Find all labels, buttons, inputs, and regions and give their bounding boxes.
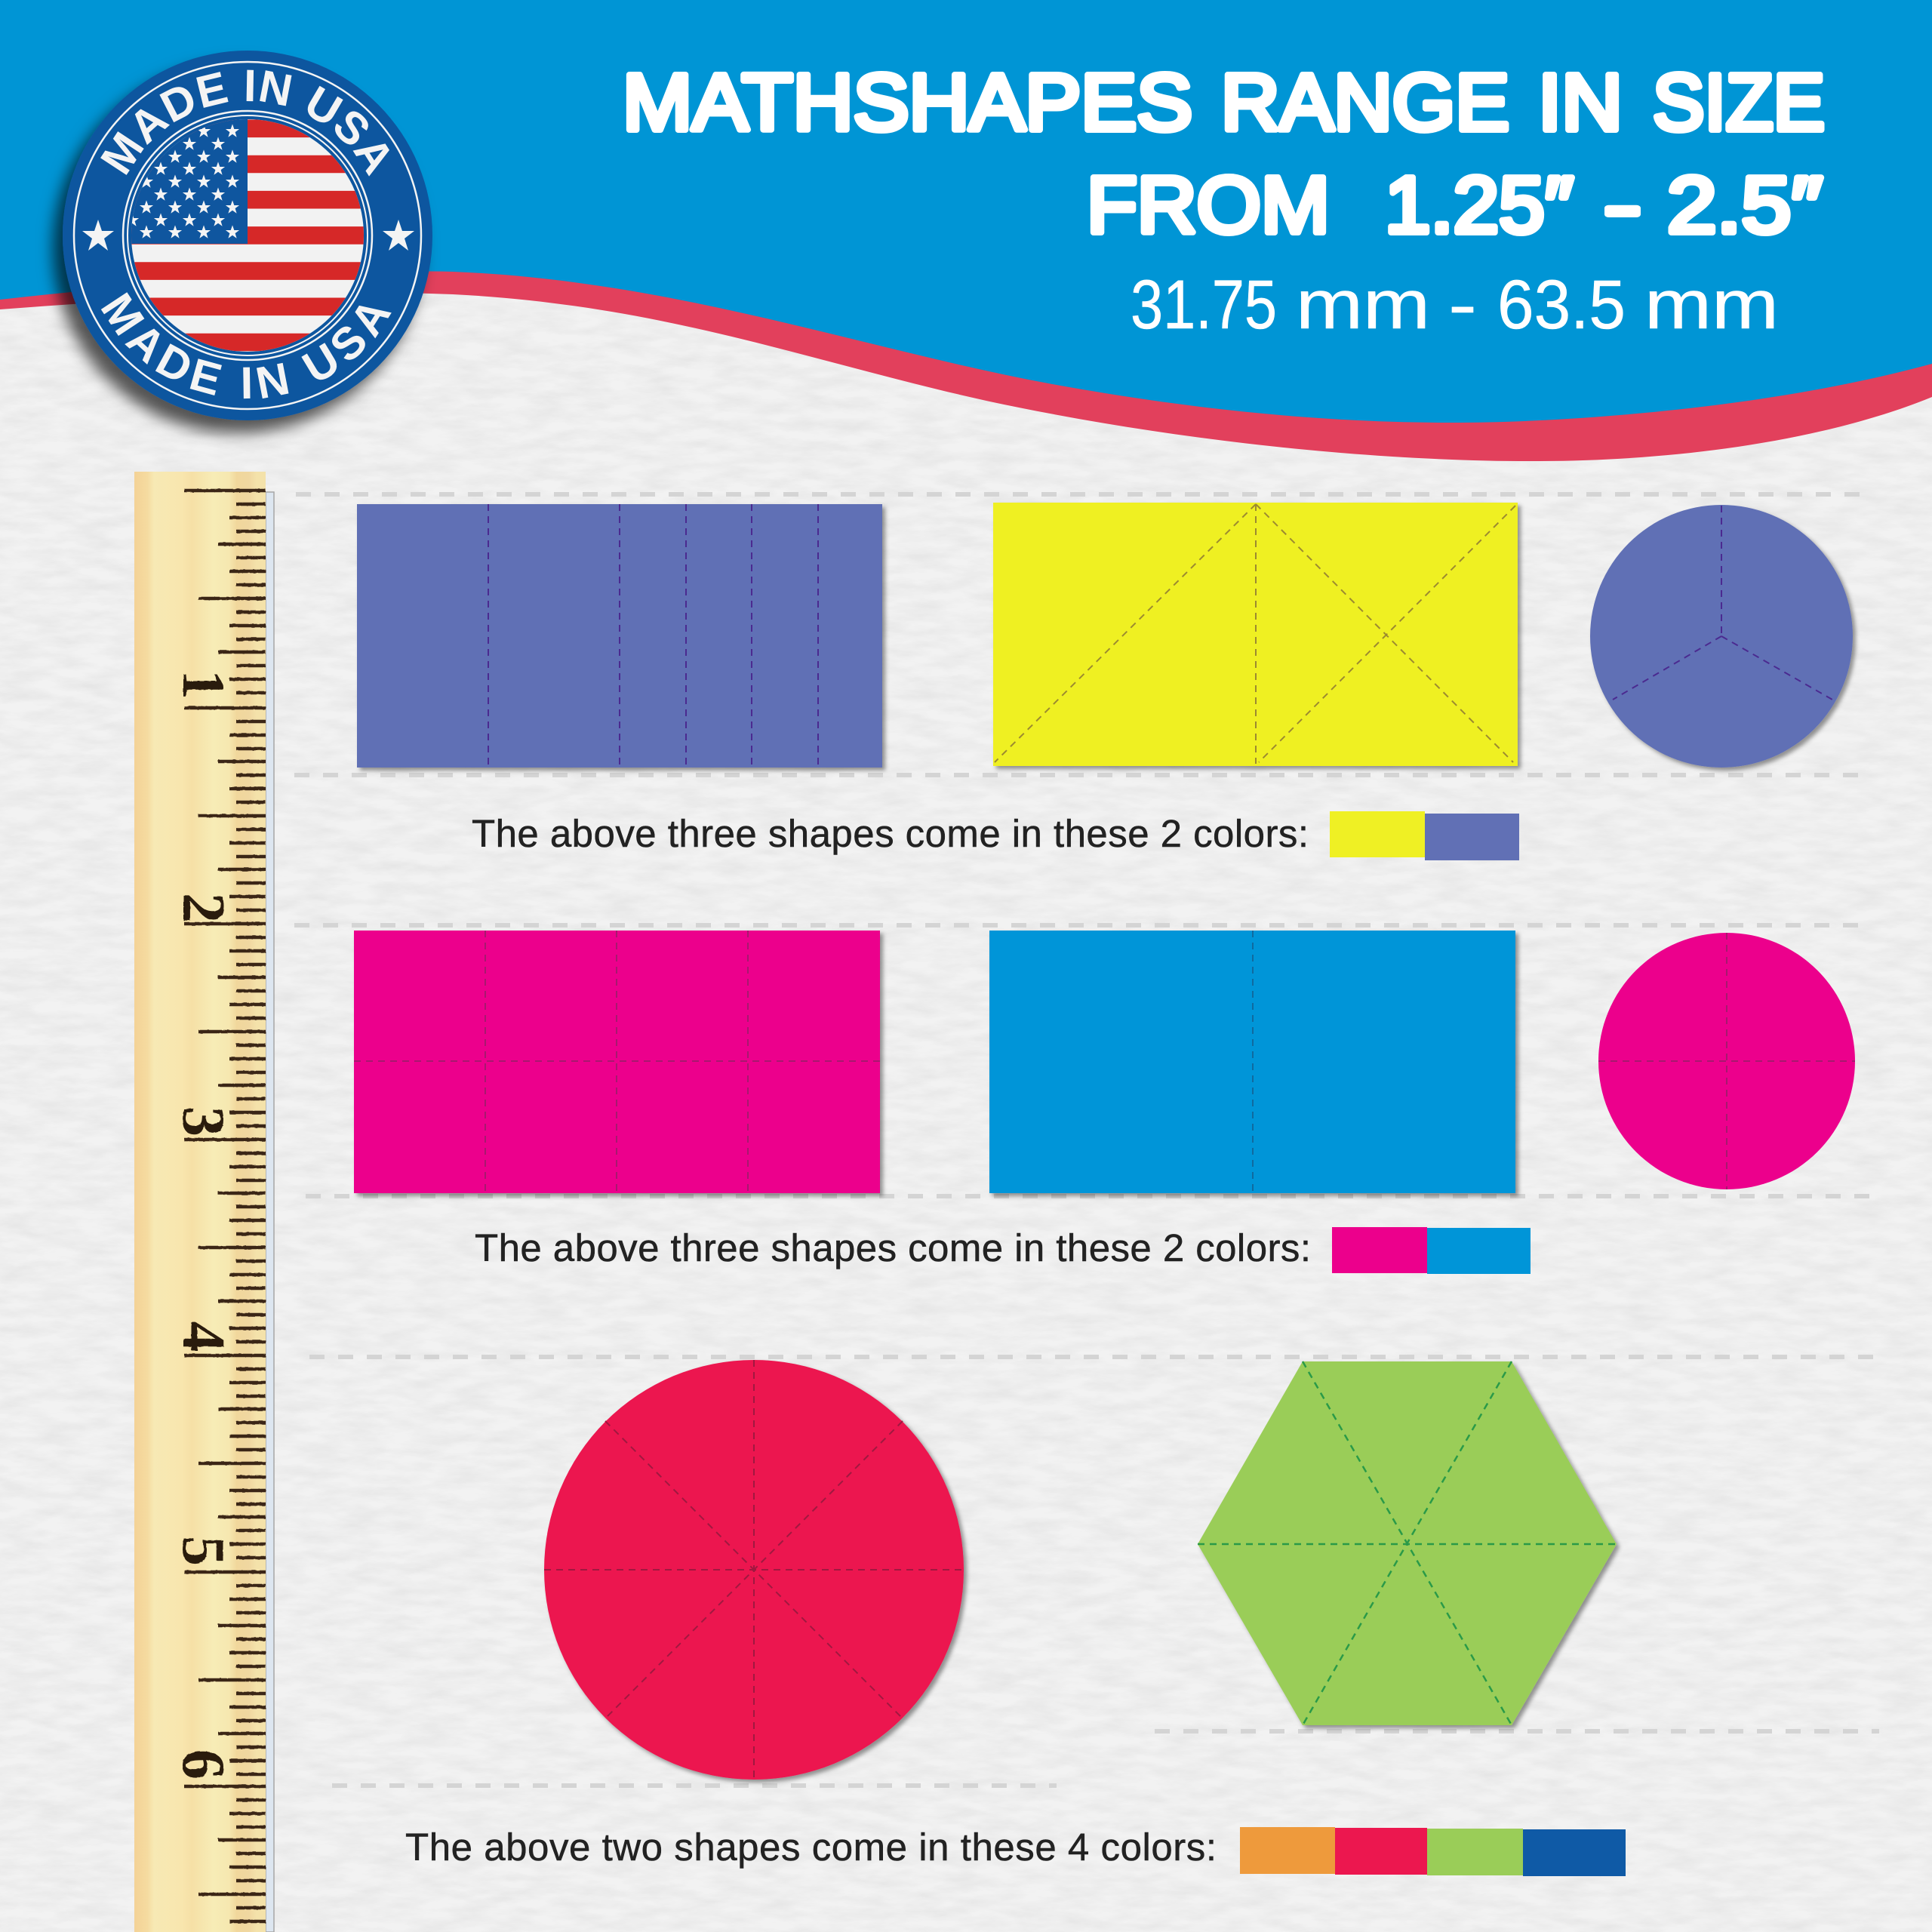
shape: green hexagon — [1198, 1361, 1617, 1725]
title: IN — [1538, 58, 1623, 147]
subtitle: metric range: mm — [1296, 266, 1430, 343]
title: MATHSHAPES — [623, 58, 1192, 147]
colors legend 1: The above three shapes come in these 2 colors: — [472, 812, 1309, 855]
ruler numbers: 4 — [170, 1321, 236, 1352]
colors legend 3: The above two shapes come in these 4 colors: — [405, 1826, 1217, 1869]
title: SIZE — [1653, 58, 1825, 147]
shape: magenta circle — [1598, 933, 1855, 1189]
title: FROM — [1087, 161, 1330, 250]
subtitle: metric range: 63.5 — [1497, 266, 1626, 343]
title: 1.25″ — [1385, 161, 1574, 250]
shape: purple circle — [1590, 505, 1853, 768]
ruler numbers: 5 — [170, 1536, 236, 1566]
ruler numbers: 3 — [170, 1106, 236, 1137]
shape: blue rectangle — [989, 931, 1515, 1193]
header banner wave — [0, 0, 1932, 461]
shape: magenta rectangle — [354, 931, 880, 1193]
ruler numbers: 1 — [170, 669, 236, 700]
shape: red circle — [544, 1360, 964, 1780]
badge stars — [82, 220, 414, 251]
title: - — [1604, 161, 1641, 250]
ruler ticks — [184, 491, 266, 1932]
subtitle: metric range — [1131, 266, 1779, 343]
shape: yellow rectangle — [993, 503, 1518, 766]
colors legend 3 — [405, 1826, 1626, 1876]
subtitle: metric range: 31.75 — [1131, 266, 1277, 343]
flag — [125, 117, 367, 355]
badge text: MADE IN USA — [101, 292, 392, 398]
subtitle: metric range: mm — [1644, 266, 1779, 343]
title — [623, 58, 1825, 250]
ruler numbers — [170, 669, 236, 1780]
shape: purple rectangle — [357, 504, 882, 768]
colors legend 2: The above three shapes come in these 2 colors: — [475, 1226, 1311, 1269]
title: 2.5″ — [1667, 161, 1823, 250]
badge text — [100, 69, 392, 398]
badge: made in USA — [42, 51, 433, 445]
ruler numbers: 6 — [170, 1749, 236, 1780]
subtitle: metric range: - — [1448, 266, 1477, 343]
dashed guide lines — [294, 494, 1883, 1786]
title: RANGE — [1221, 58, 1509, 147]
badge text: MADE IN USA — [100, 69, 389, 177]
ruler numbers: 2 — [170, 893, 236, 923]
ruler — [134, 472, 274, 1932]
